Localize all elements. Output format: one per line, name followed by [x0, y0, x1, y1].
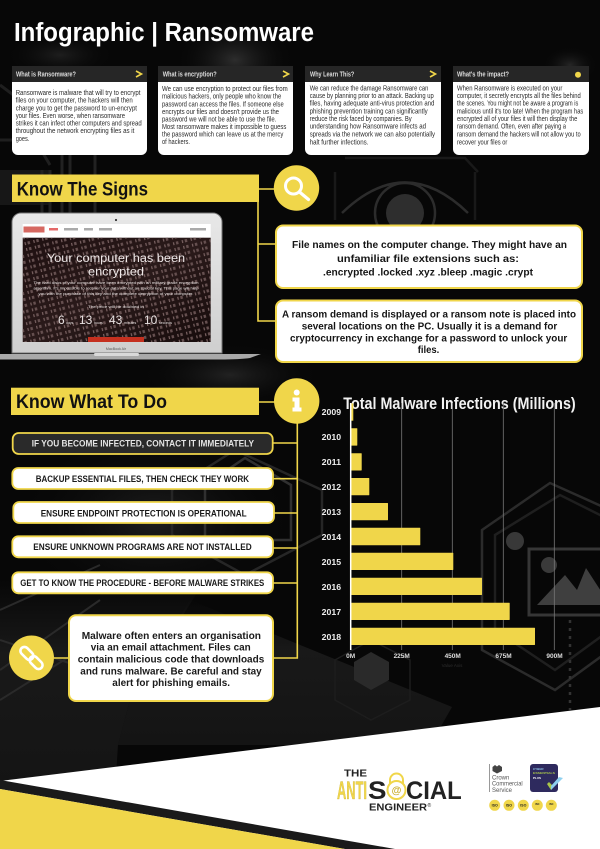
icon: padlock at sign: @: [392, 786, 402, 796]
panel: what is encryption: encrypts our files and doesn't provide us the: [162, 109, 279, 116]
bars: [351, 403, 535, 645]
heading: know what to do: [11, 388, 259, 415]
screen: ransom message: [34, 251, 198, 309]
panel: what is ransomware: [12, 66, 147, 155]
panel: what is encryption: the password which can leave us at the mercy: [162, 131, 284, 138]
callout: email attachment: contain malicious code that downloads: [78, 653, 264, 665]
panel: why learn this: halt further infections.: [310, 139, 368, 146]
pill: backup: BACKUP ESSENTIAL FILES, THEN CHECK THEY WORK: [36, 474, 250, 484]
badges: iso certifications: ISO: [520, 803, 527, 807]
callout: file names: [276, 226, 582, 288]
screen: ransom message: you with the purchase of this key and the complete decryption of your computer.: [38, 292, 194, 296]
logo: crown commercial service: Service: [492, 788, 513, 794]
screen: ransom message: Your computer has been: [47, 251, 185, 265]
pill: unknown programs: [12, 536, 273, 557]
heading: know what to do: Know What To Do: [16, 392, 167, 413]
screen: countdown: days: [66, 321, 74, 325]
logo: the antisocial engineer: CIAL: [406, 777, 462, 805]
panel: what is encryption: malicious hackers, only people who know the: [162, 94, 281, 101]
panel: what is ransomware: goes.: [16, 136, 29, 143]
pill: know the procedure: GET TO KNOW THE PROCEDURE - BEFORE MALWARE STRIKES: [20, 578, 264, 588]
logo: the antisocial engineer: ENGINEER: [369, 802, 427, 814]
pill: endpoint protection: [13, 502, 274, 523]
icon: magnifying glass: [274, 165, 319, 211]
panel: why learn this: phishing prevention training can significantly: [310, 109, 428, 116]
panel: what is encryption: password can access the files. If someone else: [162, 101, 284, 108]
panel: why learn this: [305, 66, 441, 155]
year labels: 2018: [322, 632, 341, 642]
icon: faint hexagon with picture: [482, 483, 600, 710]
year labels: 2013: [322, 507, 341, 517]
footer: white band: [0, 707, 600, 849]
screen: ransom message: The price will be doubled in: [88, 305, 144, 309]
year labels: 2011: [322, 457, 341, 467]
screen: countdown: seconds: [159, 321, 172, 325]
connector: know what to do: [54, 402, 297, 658]
value axis labels: Value Axis: [442, 663, 463, 668]
callout: email attachment: [69, 615, 273, 701]
pill: backup: [12, 468, 273, 489]
panel: why learn this: spreads via the network we can also potentially: [310, 132, 435, 139]
badges: iso certifications: ISO: [506, 803, 512, 807]
callout: file names: .encrypted .locked .xyz .bleep .magic .crypt: [323, 268, 534, 278]
year labels: 2015: [322, 557, 341, 567]
badges: iso certifications: ISO: [535, 803, 539, 806]
callout: ransom demand: several locations on the PC. Usually it is a demand for: [302, 321, 557, 332]
panel: what is ransomware: throughout the network encrypting files as it: [16, 128, 134, 135]
panel: what is ransomware: What is Ransomware?: [16, 72, 76, 79]
icon: yellow dot: [575, 72, 581, 78]
title: Infographic | Ransomware: [14, 19, 314, 47]
panel: what is ransomware: your files. Even worse, when ransomware: [16, 113, 125, 120]
pill: contact it: IF YOU BECOME INFECTED, CONTACT IT IMMEDIATELY: [32, 439, 254, 449]
panel: what is ransomware: charge you to get the password to un-encrypt: [16, 105, 137, 112]
panel: what is encryption: We can use encryption to protect our files from: [162, 86, 288, 93]
badge: cyber essentials plus: CYBER: [533, 767, 544, 771]
panel: why learn this: reduce the risk faced by companies. By: [310, 116, 412, 123]
value axis labels: 450M: [445, 653, 461, 660]
icon: information: [274, 378, 319, 424]
bar chart: total malware infections: [322, 395, 576, 668]
year labels: [322, 407, 341, 642]
screen: ransom message: The hard disks of your computer have been encrypted with an military grade encryption: [34, 281, 198, 285]
heading: know the signs: Know The Signs: [17, 180, 148, 201]
year labels: 2016: [322, 582, 341, 592]
logo: the antisocial engineer: [337, 768, 462, 814]
screen: countdown: 13: [79, 313, 93, 327]
screen: ransom message: encrypted: [88, 265, 144, 279]
panel: what is encryption: password we will not be able to use the file.: [162, 116, 276, 123]
screen: ransom message: algorithm. It's impossible to recover your data without an special key. This page will help: [34, 286, 198, 290]
pill: endpoint protection: ENSURE ENDPOINT PROTECTION IS OPERATIONAL: [41, 508, 247, 518]
footer: yellow corner: [0, 789, 345, 849]
year labels: 2017: [322, 607, 341, 617]
panel: what is ransomware: Ransomware is malware that will try to encrypt: [16, 90, 140, 97]
screen: site nav bar: [24, 226, 206, 232]
panel: why learn this: We can reduce the damage Ransomware can: [310, 85, 428, 92]
badge: cyber essentials plus: ESSENTIALS: [533, 771, 555, 775]
pill: contact it: [13, 433, 273, 454]
panel: what's the impact: [453, 66, 589, 155]
badges: iso certifications: ISO: [492, 803, 498, 807]
badge: cyber essentials plus: PLUS: [533, 776, 541, 780]
pill: know the procedure: [12, 572, 273, 593]
panel: why learn this: Why Learn This?: [310, 72, 354, 79]
value axis labels: 900M: [546, 653, 563, 660]
icon: arrow: [136, 71, 142, 77]
logo: crown commercial service: Commercial: [492, 782, 523, 788]
connector: know the signs: [258, 189, 277, 321]
screen: countdown: minutes: [124, 321, 137, 325]
callout: ransom demand: [276, 300, 582, 362]
value axis labels: 675M: [495, 653, 512, 660]
laptop with ransom screen: [0, 213, 261, 360]
logo: the antisocial engineer: ®: [428, 802, 432, 809]
year labels: 2014: [322, 532, 341, 542]
icon: arrow: [283, 71, 288, 77]
footer: black stripe: [0, 780, 395, 849]
panel: what's the impact: ransom demand. Often, even after paying a: [457, 124, 566, 131]
icon: faint hexagon with house shape: [172, 450, 322, 575]
logo: the antisocial engineer: S: [368, 777, 386, 805]
panel: what is encryption: of hackers.: [162, 139, 190, 146]
screen: countdown: 6: [58, 313, 65, 327]
laptop with ransom screen: MacBook Air: [106, 347, 127, 351]
icon: faint eye: [335, 158, 478, 243]
badges: iso certifications: ISO: [549, 803, 553, 806]
panel: what is encryption: [158, 66, 293, 155]
year labels: 2010: [322, 432, 341, 442]
callout: email attachment: alert for phishing emails.: [112, 677, 230, 689]
logo: crown commercial service: [489, 764, 523, 794]
panel: why learn this: cause by planning prior to an attack. Backing up: [310, 93, 434, 100]
logo: the antisocial engineer: THE: [344, 768, 367, 780]
callout: email attachment: and runs malware. Be careful and stay: [80, 665, 262, 677]
panel: why learn this: understanding how Ransomware infects ad: [310, 124, 426, 131]
logo: crown commercial service: Crown: [492, 776, 509, 782]
callout: ransom demand: cryptocurrency in exchange for a password to unlock your: [290, 333, 567, 344]
value axis labels: [346, 653, 563, 668]
panel: what is ransomware: files on your computer, the hackers will then: [16, 98, 133, 105]
year labels: 2009: [322, 407, 341, 417]
panel: why learn this: files, having adequate anti-virus protection and: [310, 101, 434, 108]
value axis labels: 225M: [394, 653, 410, 660]
year labels: 2012: [322, 482, 341, 492]
panel: what is encryption: Most ransomware makes it impossible to guess: [162, 124, 287, 131]
callout: ransom demand: files.: [418, 345, 440, 356]
screen: countdown: hours: [94, 321, 103, 325]
panel: what is ransomware: strikes it can infect other computers and spread: [16, 121, 142, 128]
badge: cyber essentials plus: [530, 764, 563, 792]
panel: what is encryption: What is encryption?: [163, 72, 217, 79]
panel: what's the impact: When Ransomware is executed on your: [457, 85, 563, 92]
badges: iso certifications: [489, 800, 557, 811]
icon: arrow: [430, 71, 436, 77]
panel: what's the impact: What's the impact?: [457, 72, 509, 79]
panel: what's the impact: encrypted all of your files it will then display the: [457, 116, 577, 123]
callout: email attachment: Malware often enters an organisation: [82, 630, 261, 642]
value axis labels: 0M: [346, 653, 355, 660]
screen: countdown: 43: [109, 313, 123, 327]
screen: countdown: 10: [144, 313, 158, 327]
icon: chain link: [9, 636, 54, 680]
panel: what's the impact: recover your files or: [457, 139, 508, 146]
heading: know the signs: [12, 174, 259, 202]
callout: email attachment: via an email attachment. Files can: [91, 642, 251, 654]
pill: unknown programs: ENSURE UNKNOWN PROGRAMS ARE NOT INSTALLED: [33, 542, 252, 552]
icon: faint small hexagon: [335, 640, 410, 720]
callout: ransom demand: A ransom demand is displayed or a ransom note is placed into: [282, 310, 576, 321]
callout: file names: File names on the computer change. They might have an: [292, 240, 567, 251]
logo: the antisocial engineer: ANTI: [337, 777, 367, 805]
screen: countdown: [58, 313, 172, 327]
callout: file names: unfamiliar file extensions such as:: [337, 254, 519, 265]
